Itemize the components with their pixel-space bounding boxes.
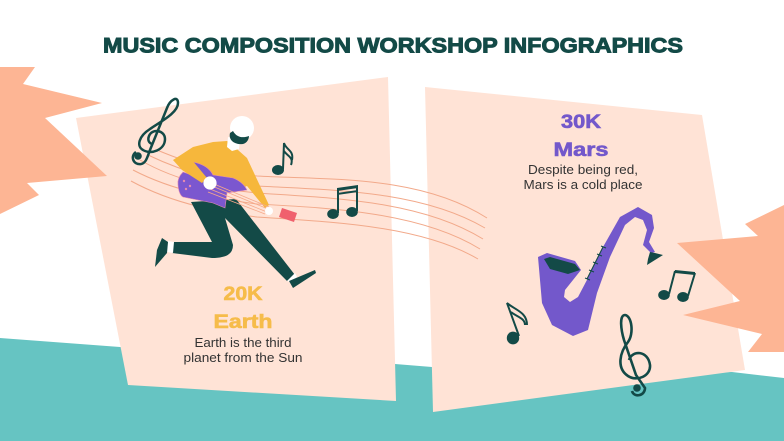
icon: saxophone [538, 207, 663, 336]
text: earth stat [184, 284, 302, 365]
back sock [167, 241, 174, 253]
value 30K: 30K [561, 112, 601, 133]
description line two: Mars is a cold place [524, 177, 642, 192]
label Mars: Mars [554, 140, 608, 161]
icon: guitarist illustration [155, 116, 316, 288]
sax keys [585, 246, 606, 280]
title: MUSIC COMPOSITION WORKSHOP INFOGRAPHICS [103, 34, 683, 58]
red headstock [279, 208, 297, 222]
sax bell opening [544, 257, 580, 274]
icon: eighth note [272, 143, 292, 175]
text: mars stat [524, 112, 642, 192]
back shoe [155, 238, 168, 267]
right orange burst [677, 205, 784, 352]
icon: treble clef left [133, 99, 178, 164]
neck [227, 137, 240, 151]
sweater [173, 141, 269, 208]
icon: beamed notes [327, 185, 358, 219]
strumming hand [203, 176, 217, 190]
description: Earth is the third [194, 335, 292, 350]
raised arm sleeve [173, 160, 207, 183]
teal ground shape [0, 338, 784, 441]
description: Despite being red, [528, 162, 638, 177]
music staff lines [131, 150, 487, 259]
guitar neck strings [208, 184, 269, 214]
guitar dots [183, 180, 191, 190]
hair [230, 116, 254, 140]
icon: treble clef right [620, 315, 650, 395]
icon: eighth note right [507, 303, 527, 344]
left orange burst [0, 67, 107, 214]
fretting hand [265, 207, 273, 215]
front shoe [289, 270, 316, 288]
beard [230, 131, 249, 144]
value 20K: 20K [224, 284, 263, 305]
description line two: planet from the Sun [184, 350, 302, 365]
front sock [287, 273, 297, 282]
label Earth: Earth [214, 312, 272, 333]
icon: beamed notes right [658, 270, 695, 302]
panel: earth [76, 77, 396, 401]
guitar body [178, 162, 247, 208]
trousers [172, 199, 295, 281]
sax mouthpiece [647, 252, 663, 265]
panel: mars [425, 87, 745, 412]
